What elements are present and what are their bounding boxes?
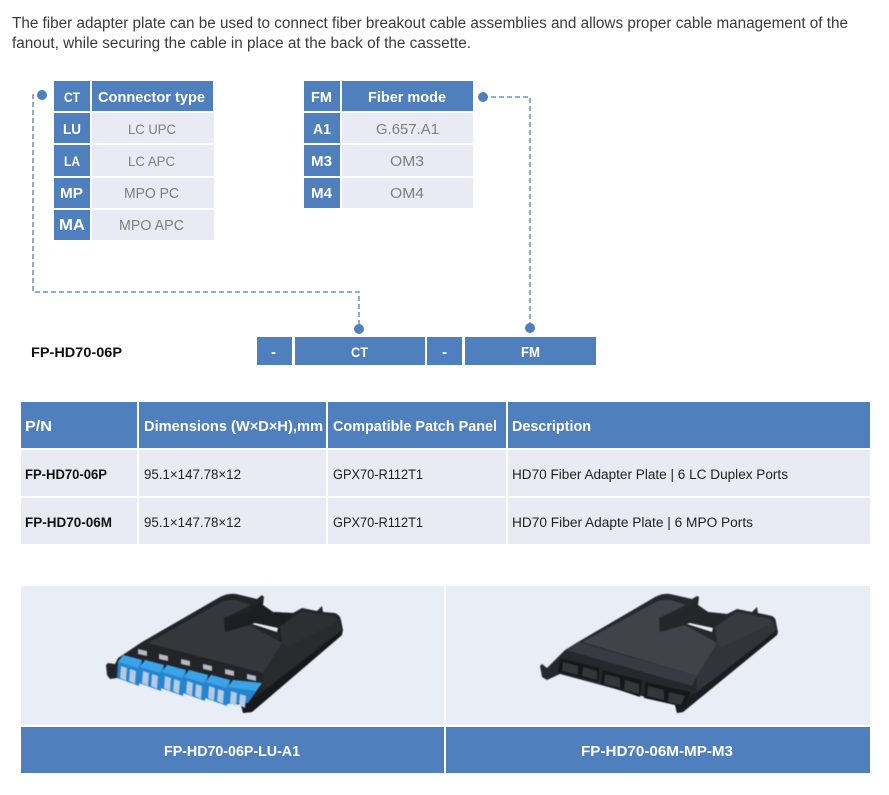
MPO ports — [558, 658, 691, 707]
arrow: fiber mode to FM segment — [478, 92, 535, 333]
icon: MPO adapter plate — [540, 594, 778, 713]
arrow: connector type to CT segment — [33, 90, 364, 334]
icon: LC adapter plate — [106, 594, 343, 713]
panel: fiber mode table: M4 — [311, 185, 333, 202]
part number code: FP-HD70-06P — [31, 345, 122, 360]
panel: connector type table: MPO PC — [124, 186, 179, 202]
panel: specification table: HD70 Fiber Adapter Plate | 6 LC Duplex Ports — [512, 467, 788, 482]
panel: specification table: Compatible Patch Panel — [333, 418, 497, 435]
panel: connector type table: LC UPC — [128, 121, 176, 137]
part number code: FM — [521, 344, 540, 361]
intro paragraph: The fiber adapter plate can be used to connect fiber breakout cable assemblies and allows proper cable management of the — [12, 15, 848, 32]
port clips — [138, 649, 256, 681]
blue LC ports — [117, 655, 262, 708]
panel: specification table: HD70 Fiber Adapte Plate | 6 MPO Ports — [512, 515, 753, 530]
panel: specification table: FP-HD70-06P — [25, 467, 107, 482]
panel: fiber mode table: OM3 — [390, 154, 424, 170]
panel: specification table: 95.1×147.78×12 — [144, 515, 241, 530]
panel: connector type table: LU — [63, 122, 81, 138]
panel: fiber mode table: M3 — [311, 153, 332, 170]
part number code: CT — [351, 344, 368, 360]
front rim — [566, 642, 697, 686]
panel: specification table: 95.1×147.78×12 — [144, 467, 241, 482]
panel: fiber mode table: G.657.A1 — [376, 122, 439, 138]
panel: specification table: Description — [512, 418, 591, 435]
panel: fiber mode table: OM4 — [390, 186, 424, 202]
panel: fiber mode table: A1 — [313, 121, 331, 138]
panel: connector type table: CT — [64, 90, 81, 105]
panel: fiber mode table: Fiber mode — [368, 90, 446, 106]
panel: specification table: Dimensions (W×D×H),mm — [144, 418, 323, 435]
panel: connector type table: MP — [60, 185, 83, 202]
panel: specification table: P/N — [25, 418, 52, 435]
caption: FP-HD70-06P-LU-A1 — [21, 727, 444, 773]
panel: connector type table: Connector type — [98, 89, 205, 106]
panel: connector type table: LA — [64, 154, 80, 169]
panel: product FP-HD70-06M-MP-M3 — [446, 586, 870, 725]
part number code: - — [442, 344, 447, 361]
panel: specification table: GPX70-R112T1 — [333, 515, 423, 530]
part number code — [31, 337, 596, 365]
panel: connector type table — [54, 81, 214, 240]
panel: connector type table: MA — [59, 217, 85, 234]
intro paragraph: fanout, while securing the cable in place at the back of the cassette. — [12, 35, 471, 52]
panel: product FP-HD70-06P-LU-A1 — [21, 586, 444, 725]
part number code: - — [271, 344, 276, 361]
panel: fiber mode table — [304, 81, 473, 208]
panel: specification table — [21, 402, 870, 544]
caption: FP-HD70-06P-LU-A1: FP-HD70-06P-LU-A1 — [164, 743, 300, 760]
panel: connector type table: LC APC — [128, 153, 175, 169]
caption: FP-HD70-06M-MP-M3: FP-HD70-06M-MP-M3 — [581, 743, 733, 760]
panel: specification table: FP-HD70-06M — [25, 515, 112, 530]
intro paragraph — [12, 15, 848, 52]
caption: FP-HD70-06M-MP-M3 — [446, 727, 870, 773]
panel: specification table: GPX70-R112T1 — [333, 467, 423, 482]
panel: fiber mode table: FM — [311, 89, 332, 106]
panel: connector type table: MPO APC — [119, 218, 184, 234]
